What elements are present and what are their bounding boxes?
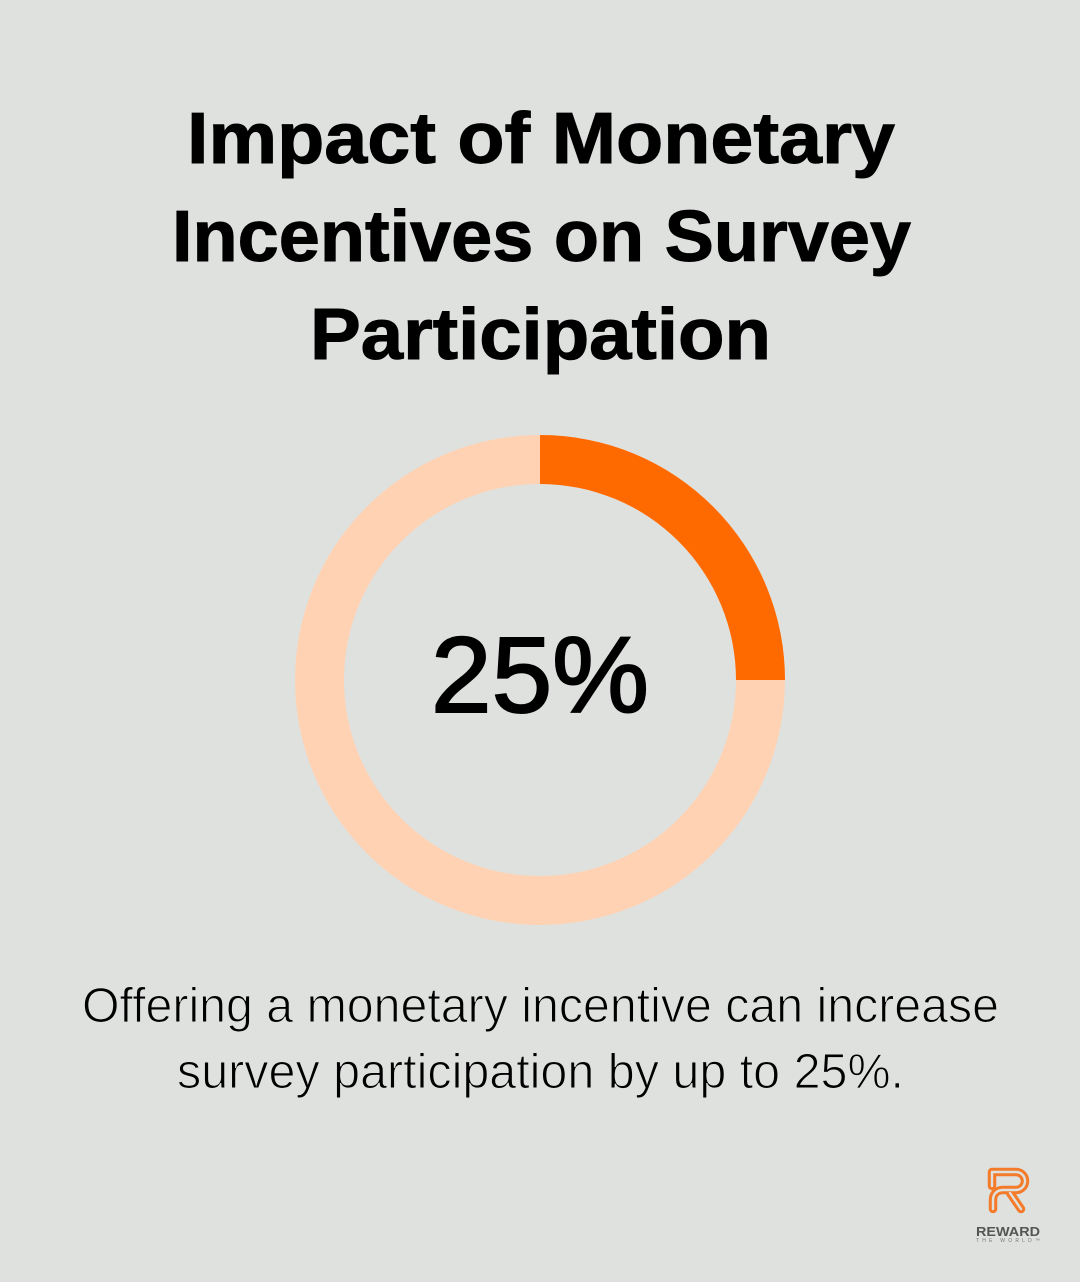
title: Participation [310, 295, 771, 375]
description text: survey participation by up to 25%. [177, 1045, 904, 1099]
description text: Offering a monetary incentive can increase [82, 979, 999, 1033]
donut track [320, 460, 760, 900]
donut highlighted segment [540, 435, 785, 680]
logo: Reward the World [976, 1172, 1040, 1244]
description text [82, 979, 999, 1099]
logo icon: R mark [992, 1172, 1025, 1209]
title: Incentives on Survey [172, 197, 911, 277]
logo tagline: THE WORLD™ [976, 1238, 1040, 1244]
center value: 25% [431, 614, 649, 735]
donut chart: 25% [320, 435, 785, 900]
title: Impact of Monetary [187, 99, 895, 179]
title [172, 99, 911, 375]
logo wordmark: REWARD [976, 1224, 1040, 1239]
